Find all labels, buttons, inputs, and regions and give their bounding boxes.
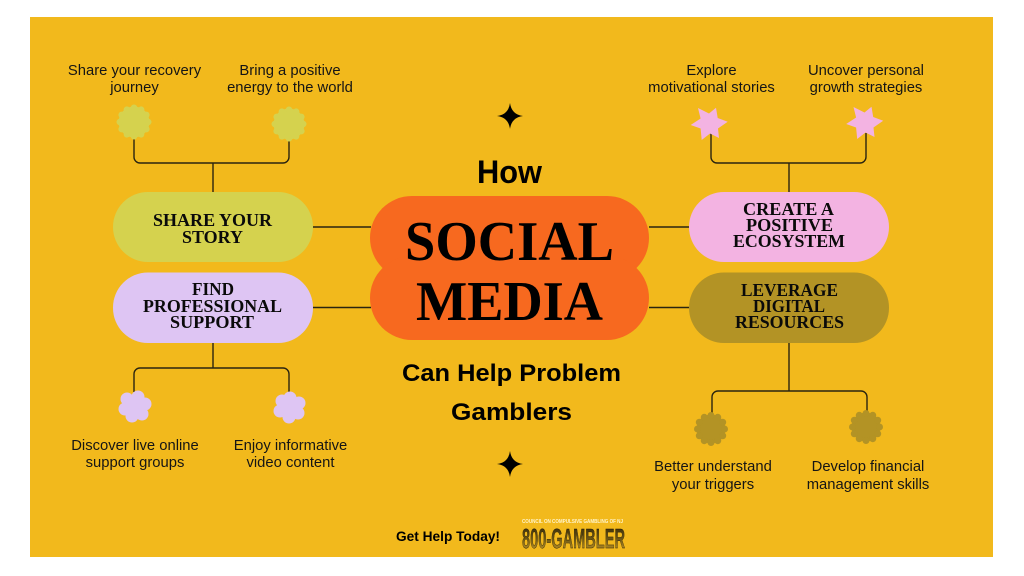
text: explore motivational stories <box>648 63 775 96</box>
icon: lavender flower left <box>118 390 152 422</box>
pill: create a positive ecosystem <box>689 192 889 262</box>
logo: 800-GAMBLER <box>522 519 625 554</box>
text: enjoy informative video content: Enjoy informative <box>234 438 347 454</box>
icon: pink star right <box>846 107 883 139</box>
text: discover live online support groups: Discover live online <box>71 438 199 454</box>
text: develop financial management skills: Develop financial <box>812 459 924 475</box>
text: uncover personal growth strategies <box>808 63 924 96</box>
text: better understand your triggers <box>654 459 772 493</box>
pill: leverage digital resources: LEVERAGE <box>741 280 838 300</box>
text: explore motivational stories: motivational stories <box>648 80 775 96</box>
text: better understand your triggers: Better understand <box>654 459 772 475</box>
sparkle bottom <box>497 451 523 477</box>
pill: find professional support <box>113 272 313 343</box>
text: uncover personal growth strategies: Uncover personal <box>808 63 924 79</box>
title: SOCIAL: SOCIAL <box>405 211 614 273</box>
central title badge <box>370 196 649 340</box>
pill: leverage digital resources: DIGITAL <box>753 296 825 316</box>
text: explore motivational stories: Explore <box>686 63 737 79</box>
sparkle top <box>497 103 523 129</box>
icon: green badge left <box>116 104 152 140</box>
subheading <box>402 360 621 426</box>
text: discover live online support groups: support groups <box>86 455 184 471</box>
text: bring a positive energy: Bring a positive <box>239 63 341 79</box>
connector lines <box>134 133 867 413</box>
heading: How: How <box>477 154 542 190</box>
pill: create a positive ecosystem: POSITIVE <box>746 215 833 235</box>
pill: share your story <box>113 192 313 262</box>
pill: find professional support: FIND <box>192 279 234 299</box>
text: uncover personal growth strategies: growth strategies <box>810 80 922 96</box>
pill: create a positive ecosystem: CREATE A <box>743 199 834 219</box>
pill: find professional support: PROFESSIONAL <box>143 296 282 316</box>
icon: olive badge right <box>849 410 883 444</box>
icon: pink star left <box>691 108 728 140</box>
text: discover live online support groups <box>71 438 199 471</box>
pill: create a positive ecosystem: ECOSYSTEM <box>733 231 845 251</box>
text: share your recovery journey: Share your recovery <box>68 63 202 79</box>
icon: olive badge left <box>694 412 728 446</box>
pill: share your story: SHARE YOUR <box>153 210 273 230</box>
text: bring a positive energy <box>227 63 353 96</box>
text: develop financial management skills <box>807 459 929 493</box>
pill: leverage digital resources: RESOURCES <box>735 312 844 332</box>
pill: find professional support: SUPPORT <box>170 312 254 332</box>
pill: leverage digital resources <box>689 272 889 343</box>
text: develop financial management skills: management skills <box>807 477 929 493</box>
text: share your recovery journey <box>68 63 202 96</box>
text: better understand your triggers: your triggers <box>672 477 754 493</box>
subheading: Can Help Problem <box>402 360 621 387</box>
logo: 800-GAMBLER: COUNCIL ON COMPULSIVE GAMBLING OF NJ <box>522 519 623 525</box>
text: enjoy informative video content <box>234 438 347 471</box>
text: enjoy informative video content: video content <box>246 455 335 471</box>
logo: 800-GAMBLER: 800-GAMBLER <box>522 523 625 554</box>
icon: lavender flower right <box>274 392 306 424</box>
subheading: Gamblers <box>451 399 572 426</box>
icon: green badge right <box>272 106 306 142</box>
pill: share your story: STORY <box>182 227 243 247</box>
text: bring a positive energy: energy to the world <box>227 80 353 96</box>
text: share your recovery journey: journey <box>109 80 159 96</box>
title: MEDIA: MEDIA <box>416 271 604 333</box>
footer call to action: Get Help Today! <box>396 529 500 544</box>
